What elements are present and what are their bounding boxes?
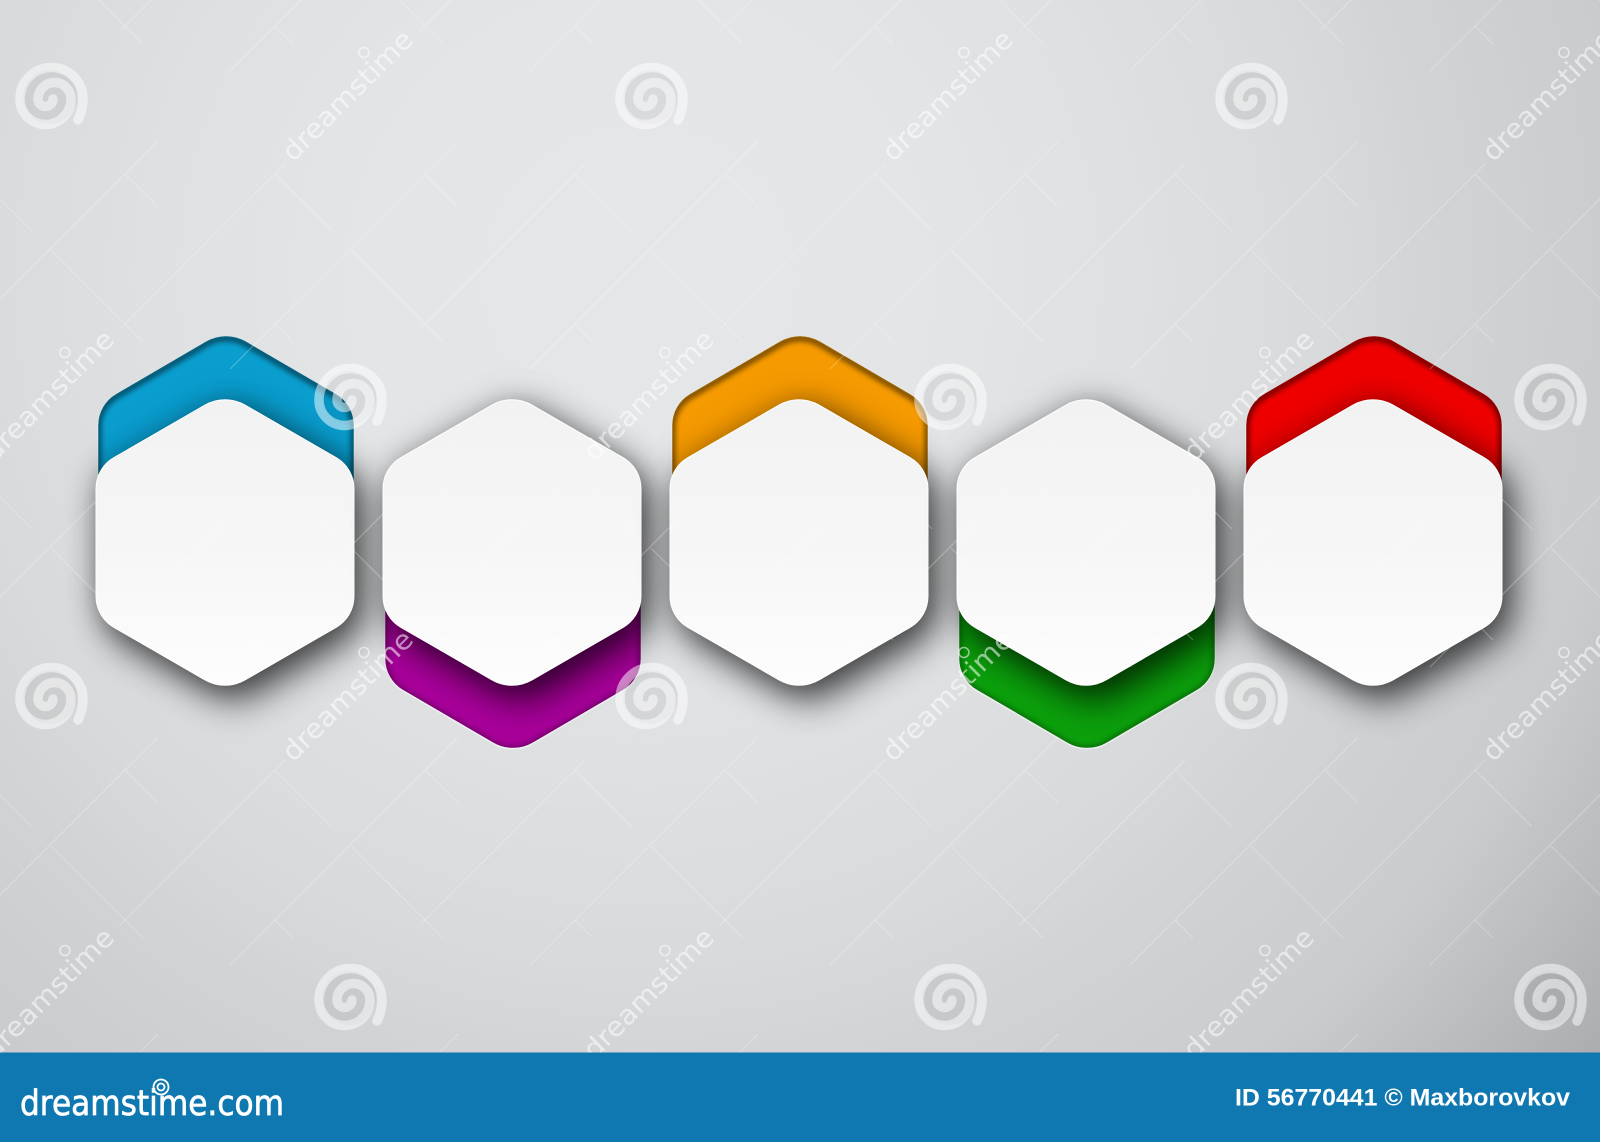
footer logo text: dreamstime.com bbox=[20, 1084, 284, 1124]
paper hexagon 2 bbox=[383, 400, 651, 701]
hexagon 3: orange cutout bbox=[672, 336, 928, 483]
hexagon 5: red cutout bbox=[1246, 336, 1502, 484]
hexagon 1: blue cutout bbox=[98, 336, 354, 483]
paper hexagon 4 bbox=[957, 400, 1225, 701]
paper hexagon 3 bbox=[670, 400, 938, 701]
paper hexagon 5 bbox=[1244, 400, 1512, 701]
hexagon 4: green cutout bbox=[958, 602, 1216, 750]
footer bar bbox=[0, 1052, 1600, 1142]
footer image id and author: ID 56770441 © Maxborovkov bbox=[1235, 1084, 1571, 1112]
hexagon 2: purple cutout bbox=[384, 602, 642, 750]
footer logo spiral bbox=[154, 1080, 168, 1094]
paper hexagon 1 bbox=[96, 400, 364, 701]
